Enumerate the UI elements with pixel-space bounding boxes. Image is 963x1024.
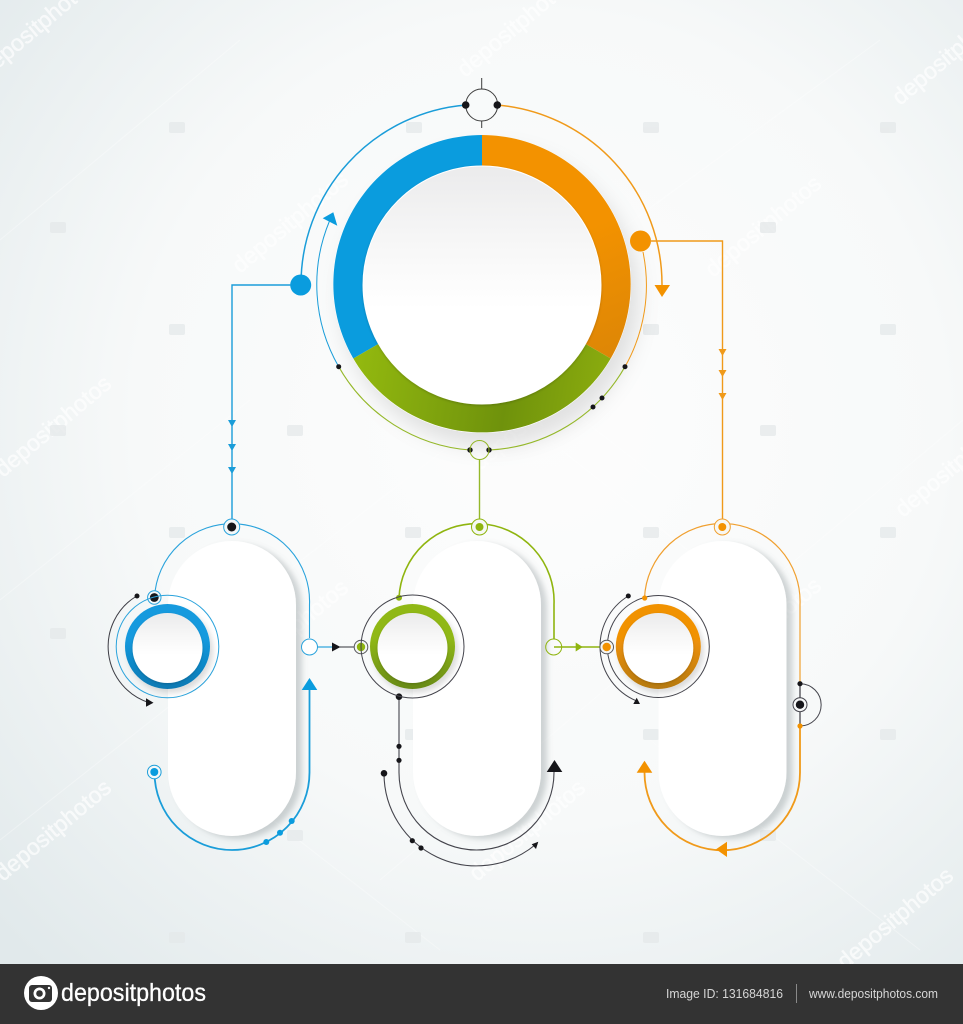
node top-left dot <box>396 595 402 601</box>
dots <box>381 693 424 851</box>
arrow up <box>302 678 317 690</box>
top outline <box>399 524 554 639</box>
divider <box>796 984 797 1003</box>
pill <box>168 541 296 836</box>
node right <box>302 639 318 655</box>
node top <box>714 519 730 535</box>
main circle orbit lines <box>301 105 662 450</box>
node left <box>148 591 161 604</box>
watermark pattern: depositphotos <box>700 572 826 684</box>
blue inner arc <box>317 221 339 367</box>
node top <box>472 519 488 535</box>
side dots <box>797 681 803 686</box>
connector: middle to right <box>554 642 600 652</box>
connector: green to middle module <box>478 460 480 520</box>
connector: blue to left module <box>228 274 311 520</box>
footer bar <box>0 964 963 1024</box>
arrow up <box>637 761 652 773</box>
top node <box>462 78 501 128</box>
badge <box>108 594 219 707</box>
bottom outline <box>154 690 310 850</box>
image id: Image ID: 131684816 <box>666 987 783 1001</box>
node side <box>793 698 807 712</box>
node right <box>546 639 562 655</box>
pill <box>658 541 786 836</box>
panel: left module <box>108 519 317 850</box>
watermark pattern: depositphotos <box>464 774 590 886</box>
arrow up <box>547 760 562 772</box>
lower black arc <box>399 697 554 850</box>
pill <box>413 541 541 836</box>
node top <box>224 519 240 535</box>
orange outer arc <box>497 105 662 285</box>
watermark pattern: depositphotos <box>832 862 958 974</box>
blue outer arc <box>301 105 466 285</box>
main circle: three-colour ring with white disc <box>333 135 631 433</box>
beads <box>263 818 295 845</box>
connector: orange to right module <box>630 230 726 520</box>
segment: orange <box>482 135 631 358</box>
panel: right module <box>600 519 821 857</box>
arrow small <box>532 842 538 849</box>
segment: green <box>353 284 611 432</box>
panel: middle module <box>354 519 562 866</box>
bottom node <box>470 440 489 460</box>
site url: www.depositphotos.com <box>808 987 938 1001</box>
half loop <box>800 684 821 726</box>
grey segment <box>799 684 801 726</box>
arrow left <box>716 842 727 857</box>
green inner arcs <box>339 367 625 450</box>
logo icon <box>24 976 58 1010</box>
node left <box>600 640 614 654</box>
bottom outline <box>644 726 800 850</box>
segment: blue <box>333 135 482 358</box>
connector: left to middle <box>318 642 354 652</box>
watermark cameras <box>50 122 896 943</box>
node left <box>354 640 368 654</box>
watermark pattern: depositphotos <box>467 363 593 475</box>
arrow: orange orbit head <box>654 285 670 297</box>
outer black arc <box>384 774 535 866</box>
top outline <box>644 523 800 684</box>
arrow: blue orbit head <box>323 212 337 226</box>
watermark pattern: depositphotos <box>227 574 353 686</box>
small dots on orbit <box>336 364 628 453</box>
logo text: depositphotos <box>61 979 206 1007</box>
badge <box>600 594 709 704</box>
white disc <box>363 166 601 404</box>
top outline <box>154 524 310 638</box>
ring shadow <box>333 135 631 433</box>
badge <box>361 595 464 698</box>
orange inner arc <box>625 252 646 367</box>
watermark pattern: depositphotos <box>227 166 353 278</box>
node bottom <box>148 765 161 779</box>
watermark pattern: depositphotos <box>700 170 826 282</box>
